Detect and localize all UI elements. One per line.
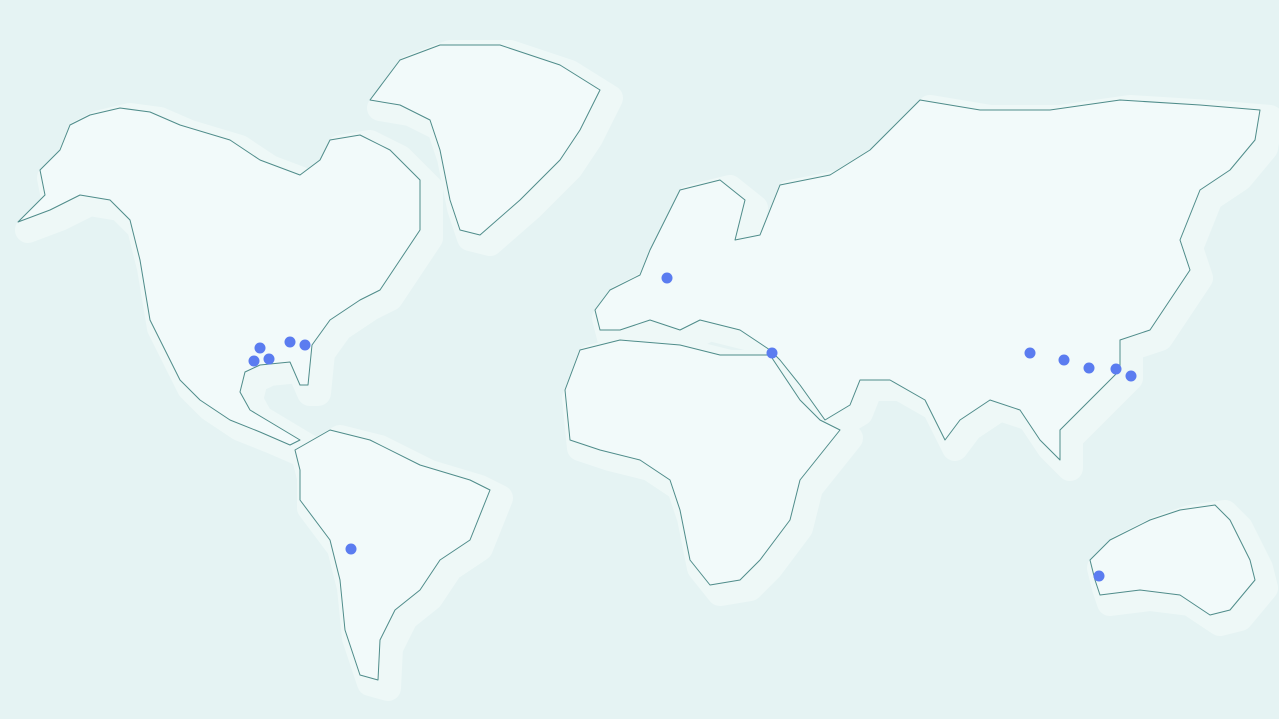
location markers [248,272,1136,582]
